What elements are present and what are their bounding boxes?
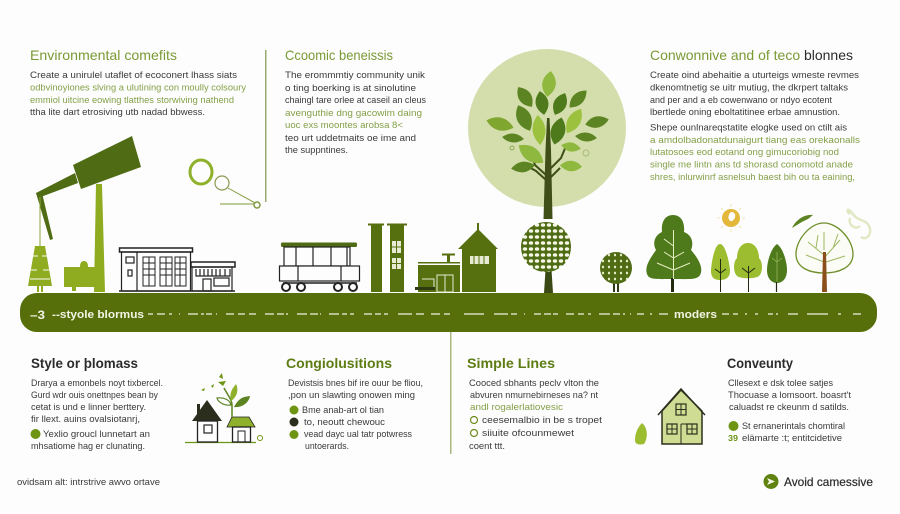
text block: environmental: emmiol uitcine eowing tlatthes storwiving nathend — [30, 95, 234, 105]
text block: conveunty: Thocuase a lomsoort. boasrt't — [728, 390, 851, 400]
heading: conveunty: Conveunty — [727, 355, 793, 371]
text block: economic: avenguthie dng gacowim daing — [285, 108, 422, 118]
divider line: bottom — [450, 332, 452, 454]
icon: large green tree — [646, 215, 701, 292]
text block: conservation: Shepe ounlnareqstatite elogke used on ctilt ais — [650, 122, 847, 132]
text block: simple lines: siiuite ofcounmewet — [482, 428, 574, 438]
text block: style: cetat is und e linner berttery. — [31, 402, 146, 412]
icon: factory house — [415, 223, 498, 292]
footer callout — [764, 474, 873, 489]
text block: conservation — [650, 70, 860, 182]
icon: small dotted tree — [600, 252, 632, 292]
footer note: ovidsam alt: intrstrive awvo ortave — [17, 477, 160, 487]
text block: congiolusitions: to, neoutt chewouc — [304, 417, 385, 427]
text block: conservation: lbertlede oning eboltatitinee erbae amnustion. — [650, 107, 840, 117]
panel: economic benefits — [285, 47, 426, 155]
heading: style: Style or þlomass — [31, 355, 138, 371]
text block: environmental: odbvinoyiones slving a ulutining con moully colsoury — [30, 82, 246, 92]
icon: building — [119, 248, 235, 291]
text block: economic — [285, 70, 426, 155]
icon: large tree in circle — [468, 49, 626, 219]
icon: arrow badge — [764, 474, 778, 489]
text block: conservation: Create oind abehaitie a uturteigs wmeste revmes — [650, 70, 859, 80]
text block: economic: The erommmtiy community unik — [285, 70, 425, 80]
icon: outlined round tree — [796, 223, 853, 292]
panel: simple lines — [467, 355, 602, 451]
band dashes — [148, 313, 861, 315]
band label: blormus: --styole blormus — [52, 309, 144, 321]
text block: economic: the suppntines. — [285, 145, 348, 155]
text block: conservation: dkenomtnetig se uitr mutiug, the dkrpert taltaks — [650, 82, 848, 92]
icon: sun — [717, 204, 745, 232]
text block: congiolusitions: vead dayc ual tatr potwress — [304, 429, 412, 439]
band label: moders: moders — [674, 309, 717, 321]
text block: simple lines: Cooced sbhants peclv vlton the — [469, 378, 599, 388]
text block: congiolusitions: Devistsis bnes bif ire ouur be fliou, — [288, 378, 423, 388]
panel: style or biomass — [30, 355, 163, 451]
icon: pale swirl — [848, 210, 870, 238]
text block: congiolusitions: Bme anab-art ol tian — [302, 405, 384, 415]
text block: simple lines — [469, 378, 602, 451]
text block: simple lines: andl rogalerlatiovesic — [470, 402, 563, 412]
heading: conservation: Conwonnive and of teco blonnes — [650, 47, 853, 63]
text block: economic: chaingl tare orlee at caseil an cleus — [285, 95, 426, 105]
icon: bird — [792, 215, 813, 228]
text block: environmental: Create a unirulel utaflet of ecoconert lhass siats — [30, 70, 237, 80]
text block: simple lines: abvuren nmurnebirneses na? nt — [470, 390, 598, 400]
heading: congiolusitions: Congiolusitions — [286, 355, 392, 371]
text block: conveunty: St ernanerintals chomtiral — [742, 421, 845, 431]
text block: style — [30, 378, 163, 451]
text block: conveunty: elämarte :t; entitcidetive — [742, 433, 842, 443]
text block: conveunty: caluadst re ckeunm d satilds. — [729, 402, 849, 412]
panel: congiolusitions — [286, 355, 423, 451]
heading: simple lines: Simple Lines — [467, 355, 555, 371]
icon: leaf — [635, 423, 647, 445]
icon: green house — [658, 389, 705, 444]
panel: conveunty — [727, 355, 851, 443]
text block: simple lines: coent ttt. — [469, 441, 505, 451]
text block: conservation: single me lintn ans td shorasd conomotd anade — [650, 160, 853, 170]
icon: train carriage — [280, 242, 360, 291]
text block: economic: uoc exs moontes arobsa 8˂ — [285, 120, 403, 130]
text block: conservation: shres, inlurwinrf asnelsuh baest bih ou ta eaining, — [650, 172, 855, 182]
heading: environmental: Environmental comefits — [30, 47, 177, 63]
text block: style: Drarya a emonbels noyt tixbercel. — [31, 378, 163, 388]
text block: congiolusitions — [288, 378, 423, 451]
divider line: left — [265, 50, 266, 202]
icon: circles and connector — [190, 160, 260, 208]
heading: economic: Ccoomic beneissis — [285, 47, 393, 63]
text block: conservation: a amdolbadonatdunaigurt tiang eas orekaonalls — [650, 135, 860, 145]
callout text: Avoid camessive — [784, 475, 873, 489]
text block: simple lines: ceesemalbio in be s tropet — [482, 415, 602, 425]
text block: style: fir llext. auins ovalsiotanrj, — [31, 414, 140, 424]
panel: environmental benefits — [30, 47, 246, 117]
text block: style: mhsatiome hag er clunating. — [31, 441, 145, 451]
text block: style: Yexlio groucl lunnetart an — [43, 429, 150, 439]
text block: environmental — [30, 70, 246, 117]
text block: conservation: lutatosoes eod eotand ong gimucoriobig nod — [650, 147, 839, 157]
timeline band — [20, 293, 877, 332]
text block: congiolusitions: ,pon un slawting onowen ming — [288, 390, 415, 400]
text block: style: Gurd wdr ouis onettnpes bean by — [31, 390, 158, 400]
text block: conveunty: 39 — [728, 433, 738, 443]
text block: conservation: and per and a eb cowenwano or ndyo ecotent — [650, 95, 832, 105]
panel: conservation and blomes — [650, 47, 860, 182]
icon: chimney towers — [368, 224, 407, 292]
text block: economic: teo urt uddetmaits oe ime and — [285, 133, 416, 143]
text block: congiolusitions: untoerards. — [305, 441, 349, 451]
icon: oil pump — [28, 136, 141, 292]
text block: environmental: ttha lite dart etrosiving utb nadad bbwess. — [30, 107, 205, 117]
band label: style: –3 — [30, 308, 45, 322]
icon: dotted tree — [521, 222, 571, 293]
text block: conveunty — [728, 378, 851, 443]
text block: economic: o ting boerking is at sinolutine — [285, 83, 416, 93]
text block: conveunty: Cllesext e dsk tolee satjes — [728, 378, 833, 388]
icon: houses with sprout — [185, 373, 262, 442]
icon: lime trees — [711, 243, 787, 292]
